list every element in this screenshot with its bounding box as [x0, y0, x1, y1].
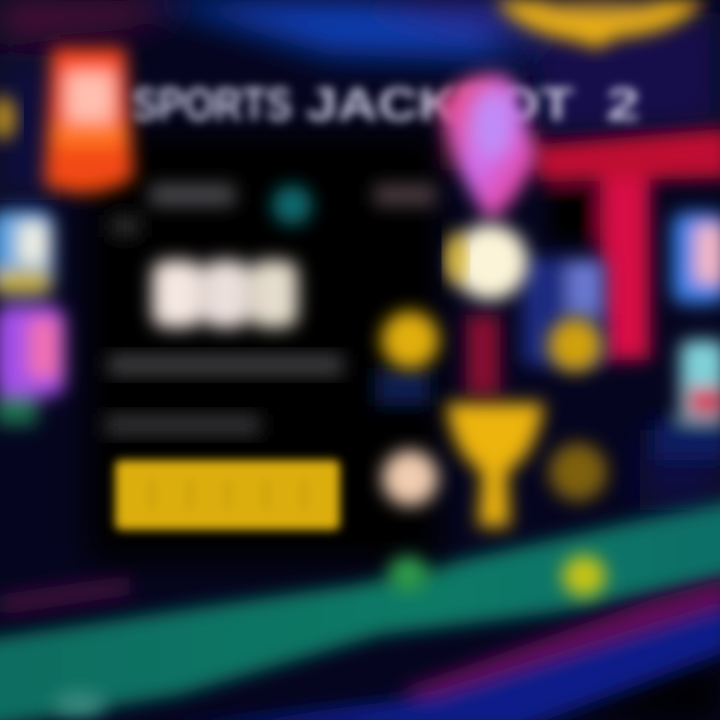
- jackpot digits: [152, 260, 298, 328]
- title: 2: [606, 78, 640, 130]
- icon: dark gold coin: [549, 443, 607, 501]
- coin gold rim: [447, 232, 465, 284]
- top gold emblem: [495, 0, 705, 48]
- floor spots: [54, 555, 606, 716]
- gold jackpot bar: [115, 460, 340, 530]
- board sub label: [105, 414, 260, 436]
- white coin: [452, 224, 528, 300]
- panel: crimson gate: [440, 128, 720, 395]
- central-right blue machine: [375, 258, 606, 406]
- icon: peach circle: [382, 450, 438, 506]
- green floor: [0, 500, 720, 720]
- left screens: [0, 210, 65, 425]
- board header labels: [110, 184, 436, 237]
- lower diagonal stripes: [0, 575, 720, 720]
- right screens: [655, 212, 720, 460]
- icon: gold coin right: [548, 318, 602, 372]
- icon: trophy: [446, 403, 544, 527]
- title: [132, 78, 640, 130]
- left gold accent: [0, 96, 16, 140]
- title: SPORTS: [132, 78, 292, 130]
- panel: black central board: [88, 132, 440, 562]
- icon: orange-red banner: [44, 48, 134, 194]
- title: JACKPOT: [306, 78, 574, 130]
- board text line: [108, 354, 343, 376]
- icon: pink and purple shield: [438, 74, 537, 222]
- icon: gold coin left: [381, 311, 439, 369]
